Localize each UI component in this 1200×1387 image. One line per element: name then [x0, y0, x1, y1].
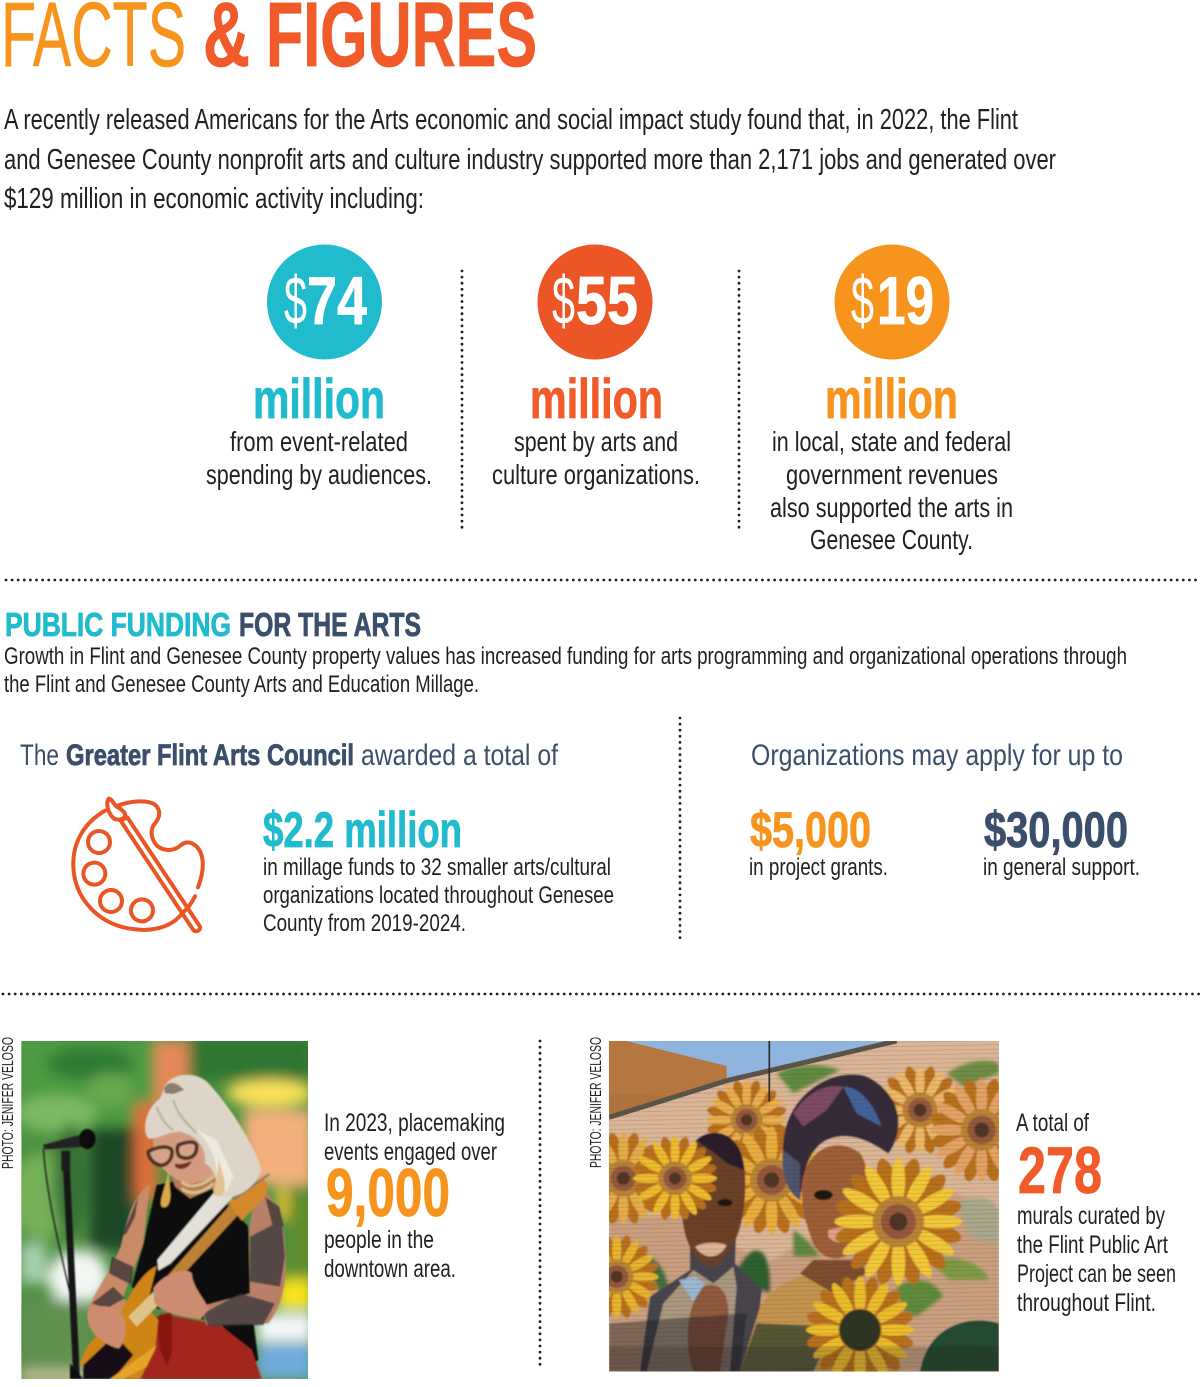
- stat: $2.2 million: $2.2 million: [263, 802, 462, 858]
- paragraph: placemaking events: [324, 1109, 505, 1283]
- icon: paint palette: [73, 799, 203, 931]
- necklace and earrings: [182, 1177, 213, 1193]
- neck and face: [172, 1176, 216, 1200]
- arts council heading: The: [20, 739, 59, 772]
- stat: $55 million: 55: [576, 263, 638, 339]
- stat: $5,000 project grants: in project grants.: [749, 854, 888, 881]
- heading: public funding: FOR THE ARTS: [239, 606, 421, 643]
- stat: $30,000 general support: in general support.: [983, 854, 1140, 881]
- stat: $19 million: in local, state and federal: [772, 426, 1011, 457]
- intro text block: $129 million in economic activity including:: [4, 183, 424, 215]
- stat: $74 million: from event-related: [230, 426, 408, 457]
- stat: $19 million: million: [825, 367, 958, 430]
- intro text block: [4, 104, 1056, 215]
- stat: $55 million: culture organizations.: [492, 459, 700, 490]
- red pants: [140, 1312, 262, 1379]
- arts council description: organizations located throughout Genesee: [263, 882, 614, 909]
- stat: $30,000 general support: [983, 802, 1140, 881]
- photo credit 1: PHOTO: JENIFER VELOSO: [0, 1037, 17, 1169]
- public funding description: the Flint and Genesee County Arts and Education Millage.: [4, 671, 479, 698]
- arts council description: County from 2019-2024.: [263, 910, 466, 937]
- paragraph: placemaking events: downtown area.: [324, 1255, 456, 1283]
- heading: public funding: [5, 606, 421, 643]
- stat: $74 million: spending by audiences.: [206, 459, 432, 490]
- paragraph: murals: [1016, 1109, 1176, 1317]
- stat: $19 million: 19: [877, 263, 934, 339]
- stat: $74 million: 74: [307, 263, 367, 339]
- arts council heading: [20, 739, 559, 772]
- stat: $74 million: million: [253, 367, 385, 430]
- right arm: [200, 1187, 286, 1325]
- stat: $19 million: [770, 244, 1013, 555]
- stat: $5,000 project grants: $5,000: [750, 802, 871, 858]
- stand and cord: [43, 1148, 72, 1300]
- guitar body: [81, 1266, 158, 1379]
- stat: $74 million: [206, 244, 432, 490]
- paragraph: placemaking events: people in the: [324, 1226, 434, 1254]
- left arm: [87, 1185, 150, 1347]
- black top: [132, 1180, 258, 1363]
- photo: guitarist: [10, 1033, 313, 1383]
- stat: $5,000 project grants: [749, 802, 888, 881]
- stat: $19 million: Genesee County.: [810, 524, 973, 555]
- girl: [740, 1275, 900, 1372]
- arts council heading: Greater Flint Arts Council: [66, 739, 354, 772]
- large sunflower: [833, 1156, 964, 1287]
- paragraph: placemaking events: In 2023, placemaking: [324, 1109, 505, 1137]
- sunflowers: [706, 1080, 788, 1144]
- heading: public funding: PUBLIC FUNDING: [5, 606, 231, 643]
- title: [1, 0, 537, 86]
- grants heading: Organizations may apply for up to: [751, 739, 1123, 772]
- arts council heading: awarded a total of: [361, 739, 559, 772]
- panel: grants: [749, 739, 1140, 881]
- stat: $19 million: $: [851, 263, 874, 339]
- stat: $55 million: [492, 244, 700, 490]
- stat: $55 million: $: [552, 263, 575, 339]
- stat: $74 million: $: [284, 263, 307, 339]
- public funding description: [4, 643, 1127, 698]
- stat: $55 million: million: [530, 367, 663, 430]
- panel: arts council award: [20, 739, 614, 937]
- paragraph: murals: throughout Flint.: [1017, 1289, 1156, 1317]
- arts council description: [263, 854, 614, 937]
- guitar strap: [157, 1193, 233, 1271]
- stat: $19 million: also supported the arts in: [770, 492, 1013, 523]
- stat: $19 million: government revenues: [786, 459, 998, 490]
- hands: [96, 1305, 126, 1350]
- boy: [640, 1210, 762, 1372]
- stat: $55 million: spent by arts and: [514, 426, 678, 457]
- paragraph: murals: A total of: [1016, 1109, 1089, 1137]
- glasses: [148, 1142, 197, 1165]
- arts council description: in millage funds to 32 smaller arts/cultural: [263, 854, 611, 881]
- photo: sunflower mural: [609, 1041, 999, 1372]
- guitar neck: [168, 1205, 240, 1282]
- hair: [145, 1075, 262, 1197]
- paragraph: murals: 278: [1018, 1133, 1102, 1207]
- paragraph: placemaking events: events engaged over: [324, 1138, 497, 1166]
- paragraph: placemaking events: 9,000: [326, 1155, 450, 1231]
- stat: $30,000 general support: $30,000: [984, 802, 1128, 858]
- photo credit 2: PHOTO: JENIFER VELOSO: [588, 1037, 605, 1168]
